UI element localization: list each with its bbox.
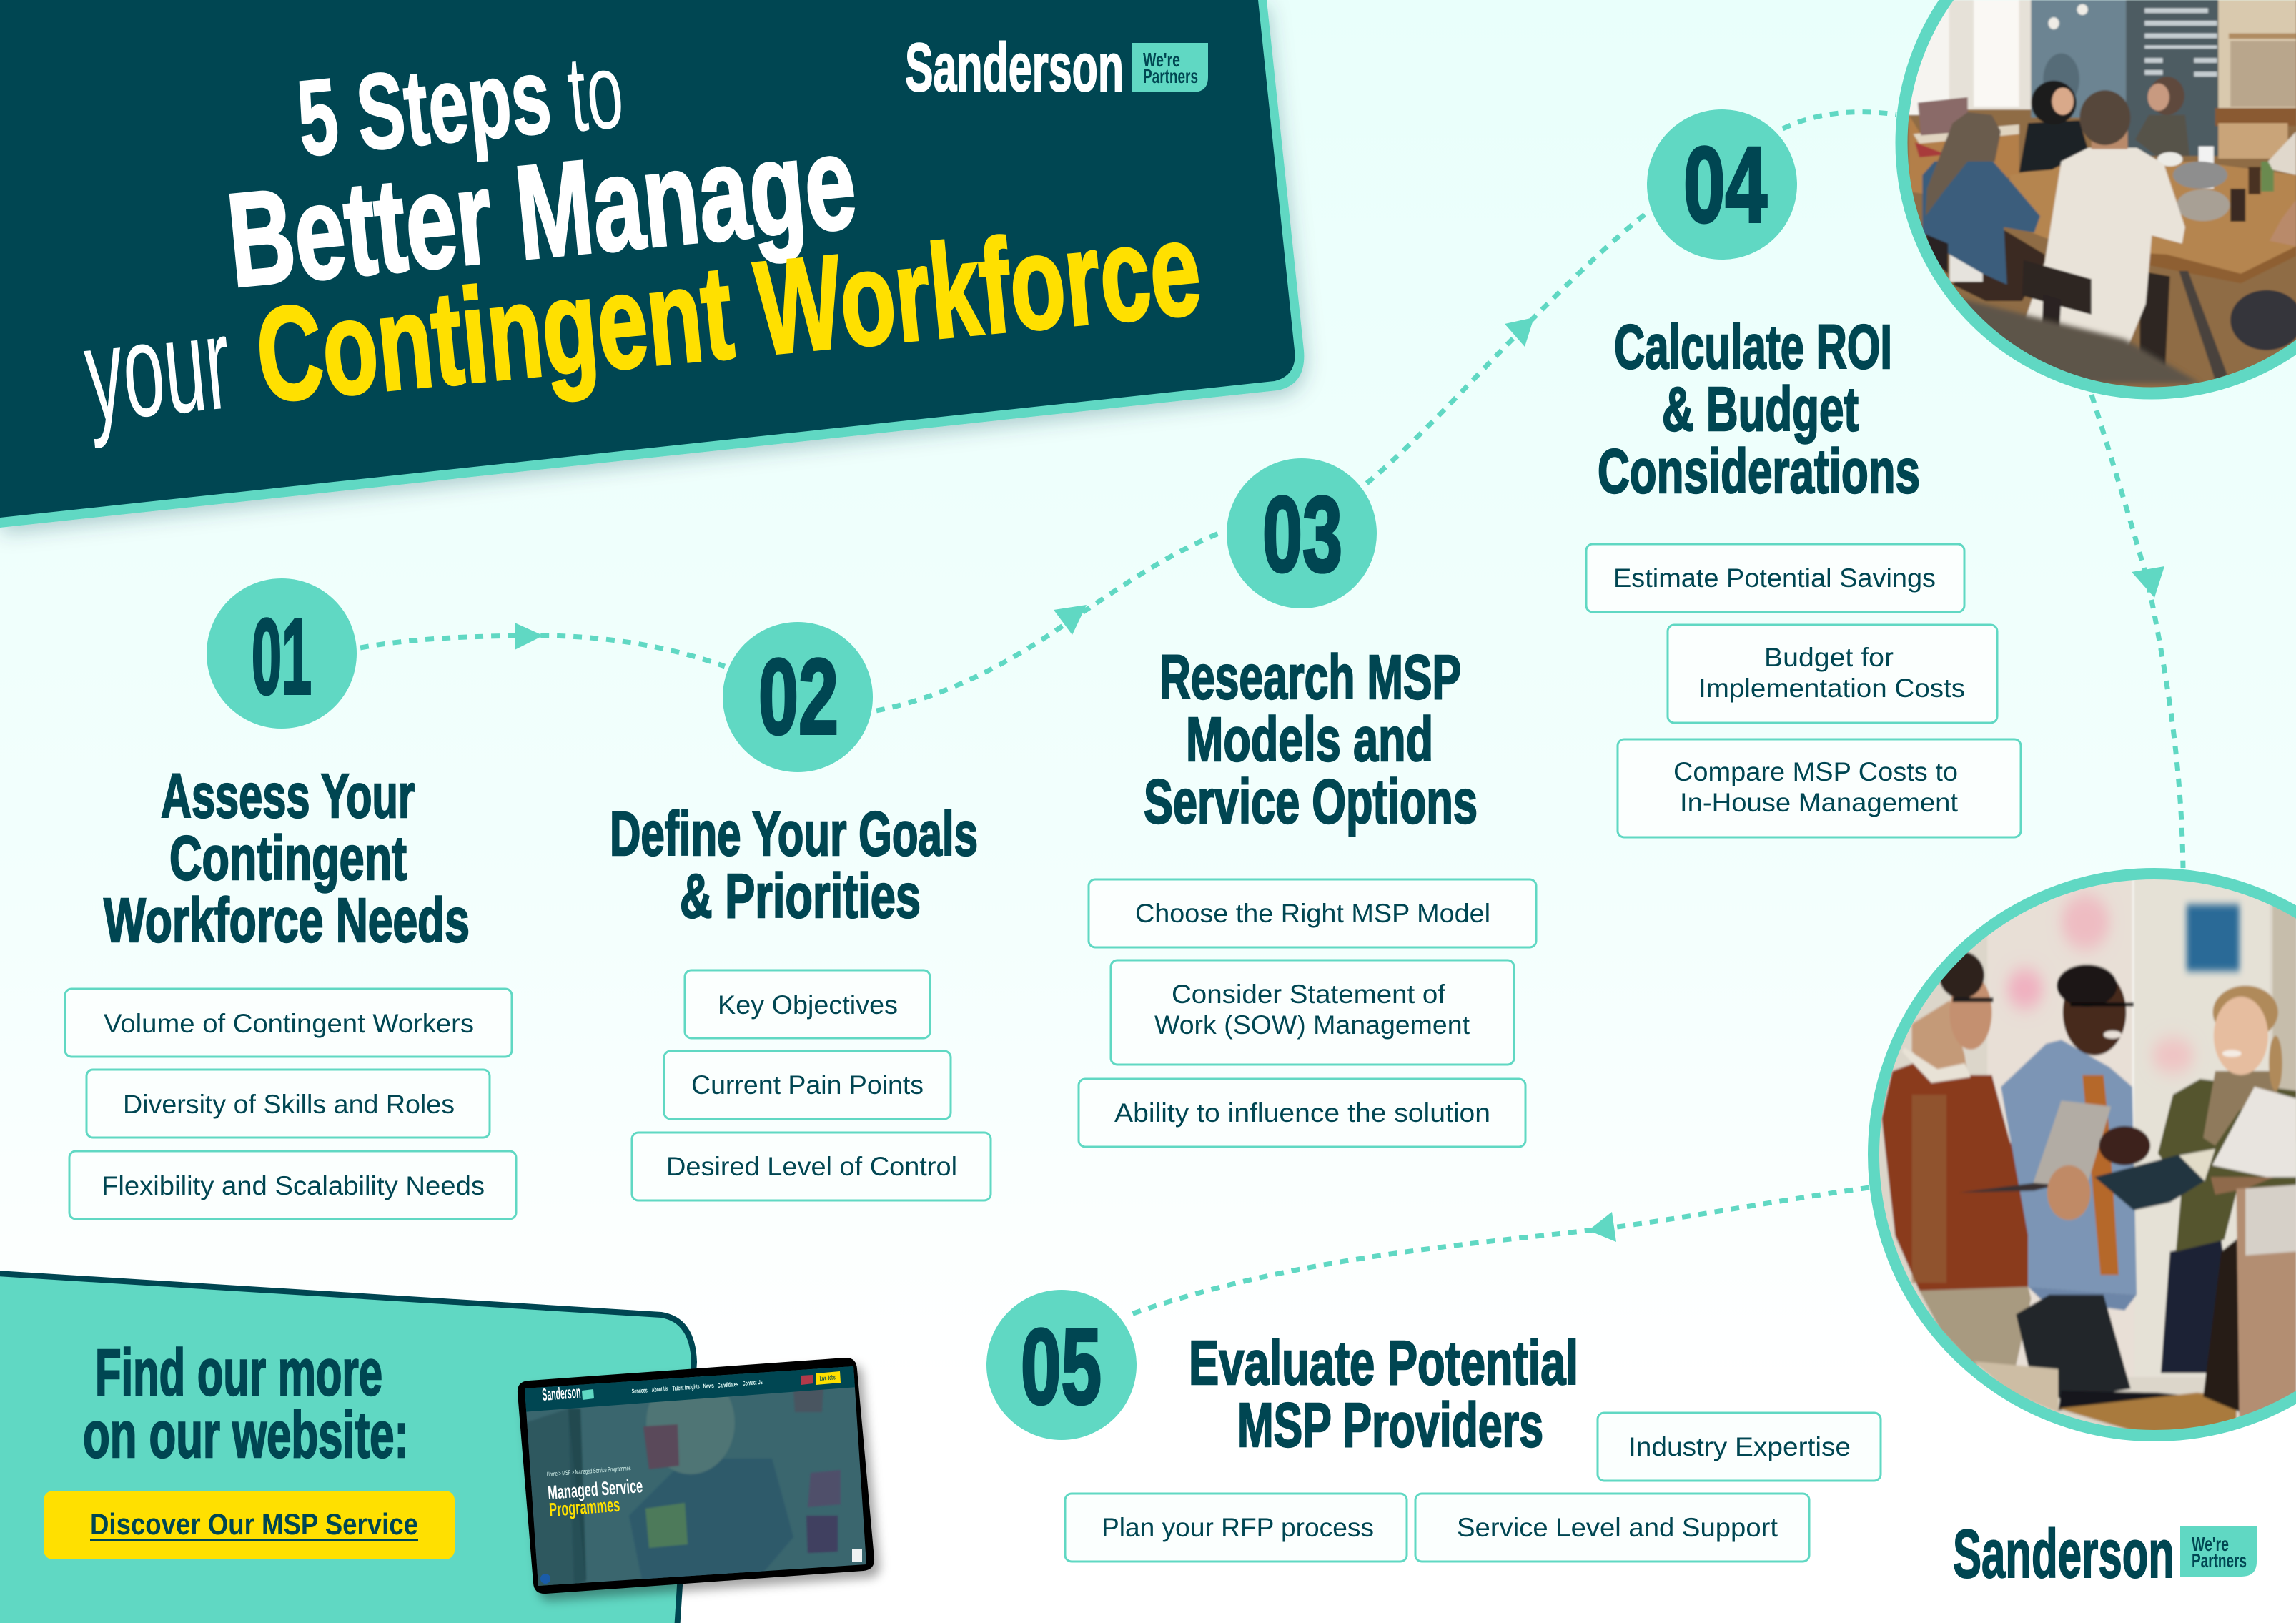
number badge 05: 05 bbox=[1021, 1306, 1102, 1426]
items 05: Industry Expertise bbox=[1628, 1432, 1851, 1461]
call to action heading bbox=[83, 1336, 409, 1471]
heading 02: Define Your Goals bbox=[610, 799, 978, 869]
title: Contingent Workforce bbox=[250, 194, 1207, 430]
tablet site navigation: Sanderson bbox=[541, 1383, 581, 1405]
number badge 02: 02 bbox=[758, 636, 838, 756]
tablet hero text bbox=[540, 1464, 862, 1584]
call to action heading: on our website: bbox=[83, 1398, 409, 1471]
heading 03: Service Options bbox=[1144, 767, 1478, 837]
logo: Sanderson bottom: Partners bbox=[2192, 1549, 2247, 1572]
header banner bbox=[0, 0, 1304, 528]
photo: team around table bbox=[1883, 0, 2296, 429]
heading 04: Considerations bbox=[1598, 437, 1920, 506]
items 04: Budget for bbox=[1764, 643, 1894, 672]
title bbox=[79, 29, 1207, 450]
heading 01: Contingent bbox=[169, 824, 407, 893]
items 01: Flexibility and Scalability Needs bbox=[102, 1171, 485, 1200]
items 02: Desired Level of Control bbox=[666, 1152, 957, 1181]
step 05 bbox=[986, 1290, 1881, 1562]
number badge 03: 03 bbox=[1262, 474, 1342, 594]
items 05: Plan your RFP process bbox=[1102, 1513, 1374, 1542]
logo: Sanderson top: Partners bbox=[1143, 65, 1198, 87]
items 01 bbox=[65, 989, 516, 1219]
items 04 bbox=[1586, 544, 2021, 837]
call to action panel bbox=[0, 1273, 694, 1623]
tablet hero text: Programmes bbox=[548, 1494, 620, 1521]
number badge 02 bbox=[723, 622, 873, 772]
number badge 01 bbox=[207, 578, 357, 729]
tablet site navigation: About Us bbox=[651, 1385, 668, 1393]
step 04 bbox=[1586, 109, 2021, 837]
logo: Sanderson top: We're bbox=[1143, 49, 1180, 71]
number badge 01: 01 bbox=[252, 596, 312, 716]
tablet hero text: Managed Service bbox=[547, 1475, 643, 1504]
tablet site navigation: News bbox=[703, 1382, 714, 1390]
heading 03: Research MSP bbox=[1159, 643, 1461, 712]
items 03: Choose the Right MSP Model bbox=[1135, 899, 1490, 928]
tablet site navigation: Live Jobs bbox=[819, 1373, 836, 1382]
items 02: Key Objectives bbox=[718, 990, 898, 1020]
items 04: In-House Management bbox=[1680, 788, 1959, 817]
number badge 03 bbox=[1227, 458, 1377, 608]
heading 02 bbox=[610, 799, 978, 931]
heading 04: Calculate ROI bbox=[1614, 312, 1892, 382]
title: your bbox=[79, 288, 237, 450]
items 03 bbox=[1079, 879, 1536, 1147]
heading 02: & Priorities bbox=[680, 862, 921, 931]
heading 04: & Budget bbox=[1662, 375, 1859, 444]
items 02: Current Pain Points bbox=[691, 1070, 924, 1100]
title: to bbox=[563, 29, 628, 154]
items 04: Estimate Potential Savings bbox=[1613, 563, 1936, 593]
button: Discover Our MSP Service: Discover Our MSP Service bbox=[90, 1507, 418, 1541]
items 04: Compare MSP Costs to bbox=[1673, 757, 1958, 786]
step 02 bbox=[610, 622, 991, 1200]
photo: colleagues with notebooks bbox=[1868, 867, 2296, 1444]
step 01 bbox=[65, 578, 516, 1219]
title: 5 Steps bbox=[292, 35, 555, 179]
items 03: Consider Statement of bbox=[1172, 980, 1446, 1009]
tablet site navigation: Candidates bbox=[717, 1381, 738, 1389]
heading 01: Assess Your bbox=[161, 761, 415, 831]
items 03: Work (SOW) Management bbox=[1154, 1010, 1470, 1040]
title: Better Manage bbox=[222, 107, 862, 315]
tablet site navigation: Services bbox=[631, 1386, 648, 1395]
items 01: Diversity of Skills and Roles bbox=[123, 1090, 455, 1119]
items 04: Implementation Costs bbox=[1698, 674, 1965, 703]
dashed journey path bbox=[360, 112, 2183, 1316]
logo: Sanderson top: Sanderson bbox=[905, 29, 1124, 106]
items 01: Volume of Contingent Workers bbox=[104, 1009, 474, 1038]
tablet site navigation: Talent Insights bbox=[672, 1383, 700, 1392]
number badge 04: 04 bbox=[1683, 124, 1767, 245]
heading 01: Workforce Needs bbox=[104, 886, 470, 955]
tablet site navigation bbox=[541, 1371, 841, 1405]
heading 05: MSP Providers bbox=[1237, 1391, 1543, 1460]
website tablet mockup bbox=[515, 1351, 879, 1602]
number badge 04 bbox=[1647, 109, 1797, 260]
heading 03: Models and bbox=[1186, 705, 1433, 774]
items 02 bbox=[632, 970, 991, 1200]
items 05 bbox=[1065, 1413, 1881, 1562]
heading 04 bbox=[1598, 312, 1920, 506]
tablet hero text: Home > MSP > Managed Service Programmes bbox=[546, 1464, 631, 1478]
items 05: Service Level and Support bbox=[1457, 1513, 1778, 1542]
heading 05: Evaluate Potential bbox=[1189, 1328, 1578, 1398]
button: Discover Our MSP Service bbox=[44, 1491, 455, 1559]
step 03 bbox=[1079, 458, 1536, 1147]
heading 05 bbox=[1189, 1328, 1578, 1460]
items 03: Ability to influence the solution bbox=[1114, 1098, 1490, 1128]
logo: Sanderson bottom: We're bbox=[2192, 1533, 2229, 1555]
heading 01 bbox=[104, 761, 470, 955]
heading 03 bbox=[1144, 643, 1478, 837]
tablet site navigation: Contact Us bbox=[742, 1378, 763, 1387]
arrowheads bbox=[515, 317, 2164, 1242]
call to action heading: Find our more bbox=[95, 1336, 382, 1409]
number badge 05 bbox=[986, 1290, 1137, 1440]
